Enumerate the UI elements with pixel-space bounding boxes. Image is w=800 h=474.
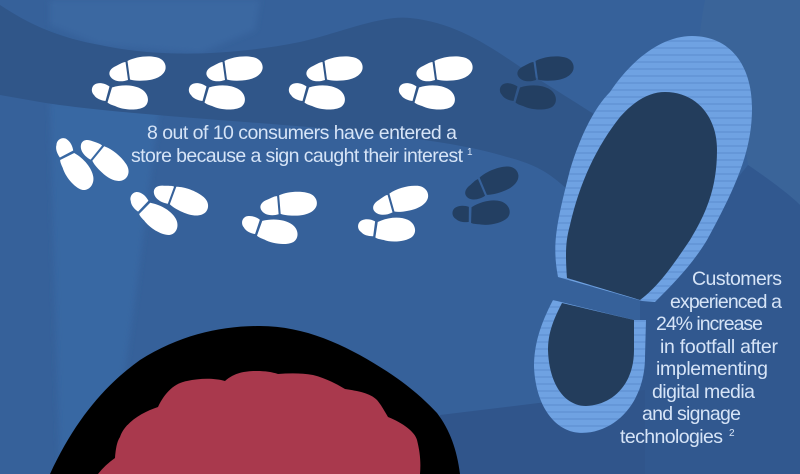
black dome bbox=[50, 326, 460, 474]
footprints: dark lower row bbox=[444, 163, 529, 234]
footfall text: in footfall after bbox=[660, 336, 778, 358]
footfall text bbox=[620, 268, 782, 448]
big footprint bbox=[534, 36, 752, 433]
consumers text: 1 bbox=[467, 147, 473, 158]
footfall text: Customers bbox=[692, 268, 782, 290]
consumers text: store because a sign caught their interest bbox=[131, 145, 464, 167]
consumers text: 8 out of 10 consumers have entered a bbox=[147, 122, 457, 144]
red brain bbox=[98, 371, 420, 474]
footprints: white lower row bbox=[44, 117, 434, 247]
footfall text: and signage bbox=[642, 403, 741, 425]
footfall text: 2 bbox=[729, 428, 735, 439]
heel inner bbox=[548, 303, 634, 406]
footfall text: implementing bbox=[656, 358, 768, 380]
footfall text: 24% increase bbox=[656, 313, 763, 335]
sole inner bbox=[566, 92, 717, 300]
sole outer bbox=[555, 36, 752, 302]
footfall text: experienced a bbox=[670, 291, 782, 313]
footfall text: digital media bbox=[652, 381, 755, 403]
footprints: dark top row bbox=[500, 56, 574, 110]
footfall text: technologies bbox=[620, 426, 723, 448]
consumers text bbox=[131, 122, 473, 167]
heel outer bbox=[534, 300, 646, 433]
footprints: white top row bbox=[92, 56, 473, 110]
